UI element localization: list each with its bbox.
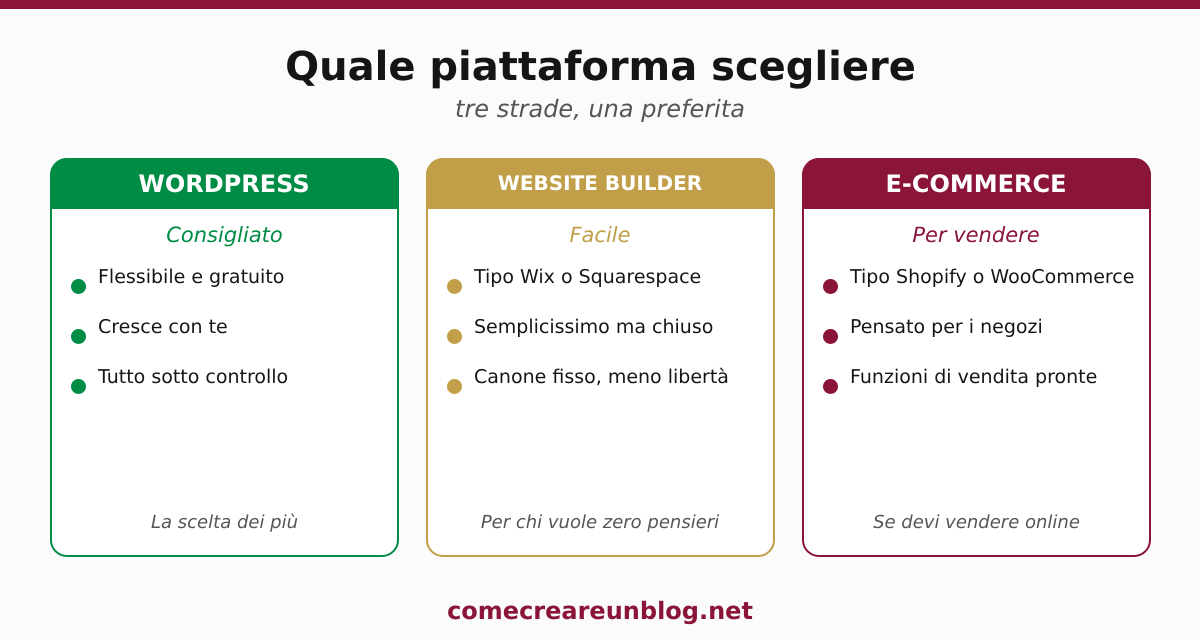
panel: WordPress (50, 158, 399, 556)
list: WordPress points (71, 266, 288, 394)
header: WordPress: WORDPRESS (138, 170, 310, 198)
note: WordPress: La scelta dei più (151, 512, 298, 533)
list: Website Builder points (447, 266, 729, 394)
subtitle: tre strade, una preferita (455, 95, 745, 123)
tagline: Per vendere: Per vendere (912, 223, 1040, 247)
header: Website Builder: WEBSITE BUILDER (498, 171, 702, 195)
tagline: Facile: Facile (569, 223, 631, 247)
list: E-commerce points (823, 266, 1134, 394)
footer: site name: comecreareunblog.net (447, 597, 753, 625)
list: E-commerce points: Tipo Shopify o WooCommerce (849, 266, 1134, 288)
header: E-commerce (802, 158, 1151, 209)
list: Website Builder points: Tipo Wix o Squarespace (473, 266, 701, 288)
list: E-commerce points: Funzioni di vendita pronte (850, 366, 1097, 388)
title: Quale piattaforma scegliere (285, 44, 916, 90)
header: E-commerce: E-COMMERCE (885, 170, 1067, 198)
list: WordPress points: Tutto sotto controllo (97, 366, 288, 388)
note: Website Builder: Per chi vuole zero pensieri (481, 512, 719, 533)
header: WordPress (50, 158, 399, 209)
list: Website Builder points: Canone fisso, meno libertà (474, 366, 729, 388)
list: WordPress points: Cresce con te (98, 316, 228, 338)
list: E-commerce points: Pensato per i negozi (850, 316, 1043, 338)
list: Website Builder points: Semplicissimo ma chiuso (474, 316, 713, 338)
header: Website Builder (426, 158, 775, 209)
top bar (0, 0, 1200, 9)
panel: Website Builder (426, 158, 775, 556)
note: E-commerce: Se devi vendere online (873, 512, 1080, 533)
list: WordPress points: Flessibile e gratuito (98, 266, 284, 288)
tagline: Consigliato: Consigliato (166, 223, 283, 247)
panel: E-commerce (802, 158, 1151, 556)
